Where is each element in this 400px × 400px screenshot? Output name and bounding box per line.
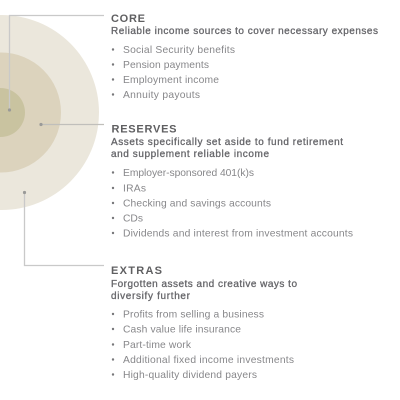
list: core: Social Security benefits — [123, 45, 235, 56]
list: reserves: IRAs — [123, 184, 146, 194]
list: core: Employment income — [123, 75, 219, 86]
section: extras — [111, 265, 297, 381]
middle ring: reserves — [0, 52, 61, 172]
description: core: Reliable income sources to cover necessary expenses — [111, 26, 378, 37]
description: extras: diversify further — [111, 291, 191, 302]
description: reserves: and supplement reliable income — [111, 149, 269, 160]
inner circle: core — [0, 88, 25, 137]
heading: reserves: RESERVES — [112, 124, 176, 136]
list: extras — [112, 310, 294, 381]
list: reserves: CDs — [123, 214, 143, 224]
list: extras: Additional fixed income investments — [123, 355, 294, 366]
outer ring: extras — [0, 15, 99, 210]
list: core — [112, 45, 235, 101]
list: reserves: Dividends and interest from investment accounts — [123, 229, 353, 240]
list: reserves: Checking and savings accounts — [123, 198, 271, 210]
description: reserves: Assets specifically set aside to fund retirement — [111, 137, 343, 148]
list: extras: Profits from selling a business — [123, 310, 264, 320]
connector: core — [8, 16, 104, 112]
section: core — [111, 13, 378, 101]
connector: reserves — [39, 123, 104, 126]
list: core: Annuity payouts — [123, 90, 200, 101]
heading: core: CORE — [111, 13, 145, 25]
heading: extras: EXTRAS — [111, 265, 162, 277]
list: core: Pension payments — [123, 60, 209, 71]
concentric circles diagram — [0, 15, 99, 210]
list: extras: Cash value life insurance — [123, 325, 241, 336]
list: extras: Part-time work — [123, 340, 192, 351]
list: reserves: Employer-sponsored 401(k)s — [123, 168, 254, 179]
connector: extras — [23, 191, 104, 266]
description: extras: Forgotten assets and creative ways to — [111, 279, 297, 290]
list: reserves — [112, 168, 353, 240]
section: reserves — [111, 124, 353, 240]
list: extras: High-quality dividend payers — [123, 370, 257, 381]
